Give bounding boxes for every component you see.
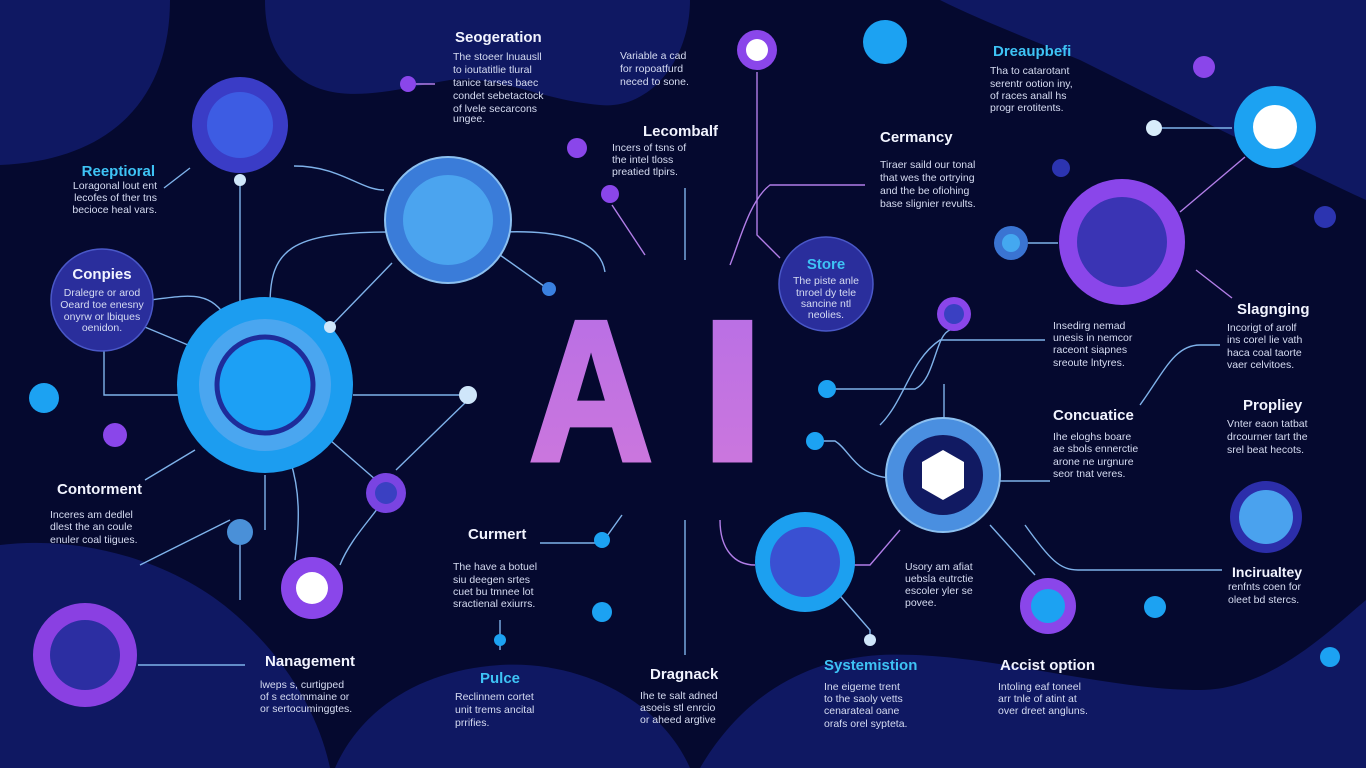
text: Seogeration: Seogeration [455, 29, 542, 46]
panel: Conpies: Conpies [72, 266, 132, 283]
node: top purple white [737, 30, 777, 70]
text: Insecing [1053, 320, 1133, 369]
text: Systemistion: orafs orel sypteta. [824, 718, 907, 730]
text: Pulce: Pulce [480, 670, 520, 687]
text: Seogeration: condet sebetactock [453, 90, 544, 102]
node: top-left blue [192, 77, 288, 173]
text: Slagnging: haca coal taorte [1227, 347, 1302, 359]
connectors [104, 72, 1245, 665]
text: Systemistion: Systemistion [824, 657, 917, 674]
text: Seogeration: ungee. [453, 113, 485, 125]
text: Propliey [1227, 397, 1308, 456]
text: Accist option [998, 657, 1095, 717]
text: Accist option: Intoling eaf toneel [998, 681, 1081, 693]
text: Contorment: dlest the an coule [50, 521, 132, 533]
text: Pulce: unit trems ancital [455, 704, 534, 716]
text: Seogeration: The stoeer lnuausll [453, 51, 542, 63]
text: Pulce: Reclinnem cortet [455, 691, 534, 703]
panel: Conpies [51, 249, 153, 351]
text: Contorment: Inceres am dedlel [50, 509, 133, 521]
text: Slagnging: ins corel lie vath [1227, 334, 1302, 346]
text: Reeptioral: Reeptioral [82, 163, 155, 180]
panel: Conpies: oenidon. [82, 322, 122, 334]
text: Curmert: sractienal exiurrs. [453, 598, 535, 610]
text: Curmert: siu deegen srtes [453, 574, 530, 586]
AI title: A [529, 280, 653, 503]
text: Incirualtey: Incirualtey [1232, 564, 1302, 580]
text: Curmert: Curmert [468, 526, 526, 543]
node: right dark blue [1230, 481, 1302, 553]
text: Variable: for ropoatfurd [620, 63, 683, 75]
text: Systemistion: to the saoly vetts [824, 693, 903, 705]
panel: Store: sancine ntl [801, 298, 851, 310]
AI title: I [700, 280, 765, 503]
text: Cermancy: Cermancy [880, 129, 953, 146]
text: Dreaupbefi: progr erotitents. [990, 102, 1064, 114]
node: bottom blue [755, 512, 855, 612]
text: Variable: Variable a cad [620, 50, 687, 62]
text: Usory: escoler yler se [905, 585, 973, 597]
text: Curmert: cuet bu tmnee lot [453, 586, 534, 598]
text: Curmert [453, 526, 537, 610]
text: Insecing: unesis in nemcor [1053, 332, 1133, 344]
text: Seogeration: of lvele secarcons [453, 103, 537, 115]
text: Propliey: srel beat hecots. [1227, 444, 1304, 456]
text: Reeptioral [72, 163, 157, 216]
text: Concuatice: seor tnat veres. [1053, 468, 1125, 480]
node: big purple right [1059, 179, 1185, 305]
text: Systemistion [824, 657, 917, 730]
text: Slagnging: vaer celvitoes. [1227, 359, 1294, 371]
text: Dreaupbefi: serentr ootion iny, [990, 78, 1073, 90]
text: Usory: uebsla eutrctie [905, 573, 973, 585]
text: Usory [905, 561, 973, 609]
text: Nanagement [260, 653, 355, 715]
text: Cermancy: Tiraer saild our tonal [880, 159, 975, 171]
text: Incirualtey: renfnts coen for [1228, 581, 1301, 593]
text: Incirualtey [1228, 564, 1302, 606]
panel: Store [779, 237, 873, 331]
text: Nanagement: lweps s, curtigped [260, 679, 344, 691]
text: Dreaupbefi: Tha to catarotant [990, 65, 1069, 77]
text: Accist option: over dreet angluns. [998, 705, 1088, 717]
node: hexagon hub [886, 418, 1000, 532]
node: top right white [1234, 86, 1316, 168]
text: Nanagement: Nanagement [265, 653, 355, 670]
text: Dreaupbefi: Dreaupbefi [993, 43, 1071, 60]
text: Dragnack: asoeis stl enrcio [640, 702, 715, 714]
panel: Store: neolies. [808, 309, 844, 321]
text: Pulce [455, 670, 534, 729]
text: Dreaupbefi: of races anall hs [990, 90, 1066, 102]
text: Concuatice: arone ne urgnure [1053, 456, 1134, 468]
text: Propliey: drcourner tart the [1227, 431, 1308, 443]
text: Reeptioral: Loragonal lout ent [73, 180, 157, 192]
text: Propliey: Vnter eaon tatbat [1227, 418, 1308, 430]
text: Usory: Usory am afiat [905, 561, 973, 573]
text: Insecing: raceont siapnes [1053, 344, 1127, 356]
text: Dragnack: Dragnack [650, 666, 719, 683]
text: Dreaupbefi [990, 43, 1073, 114]
text: Concuatice [1053, 407, 1138, 480]
text: Concuatice: Concuatice [1053, 407, 1134, 424]
text: Lecombalf: Lecombalf [643, 123, 719, 140]
text: Curmert: The have a botuel [453, 561, 537, 573]
text: Reeptioral: becioce heal vars. [72, 204, 157, 216]
text: Usory: povee. [905, 597, 937, 609]
text: Systemistion: cenarateal oane [824, 705, 899, 717]
text: Slagnging: Slagnging [1237, 301, 1310, 318]
text: Seogeration: tanice tarses baec [453, 77, 538, 89]
panel: Store: tnroel dy tele [796, 287, 856, 299]
text: Cermancy: base slignier revults. [880, 198, 976, 210]
text: Dragnack: Ihe te salt adned [640, 690, 718, 702]
text: Pulce: prrifies. [455, 717, 489, 729]
text: Cermancy: that wes the ortrying [880, 172, 975, 184]
node: upper middle blue [385, 157, 511, 283]
text: Variable [620, 50, 689, 88]
text: Slagnging: Incorigt of arolf [1227, 322, 1297, 334]
text: Propliey: Propliey [1243, 397, 1303, 414]
text: Lecombalf [612, 123, 719, 178]
text: Seogeration: to ioutatitlie tlural [453, 64, 532, 76]
node: bottom-left purple [33, 603, 137, 707]
text: Lecombalf: Incers of tsns of [612, 142, 686, 154]
text: Insecing: sreoute lntyres. [1053, 357, 1125, 369]
panel: Store: The piste anle [793, 275, 859, 287]
text: Seogeration [453, 29, 544, 125]
panel: Conpies: Dralegre or arod [64, 287, 140, 299]
text: Cermancy: and the be ofiohing [880, 185, 969, 197]
text: Contorment: Contorment [57, 481, 142, 498]
panel: Conpies: Oeard toe enesny [60, 299, 144, 311]
panel: Conpies: onyrw or lbiques [64, 311, 140, 323]
text: Concuatice: ae sbols ennerctie [1053, 443, 1138, 455]
text: Slagnging [1227, 301, 1310, 371]
text: Variable: neced to sone. [620, 76, 689, 88]
text: Accist option: Accist option [1000, 657, 1095, 674]
text: Incirualtey: oleet bd stercs. [1228, 594, 1299, 606]
text: Concuatice: Ihe eloghs boare [1053, 431, 1131, 443]
node: small blue right [994, 226, 1028, 260]
text: Nanagement: or sertocuminggtes. [260, 703, 352, 715]
text: Contorment [50, 481, 142, 546]
node: small purple center right [937, 297, 971, 331]
text: Reeptioral: lecofes of ther tns [74, 192, 157, 204]
text: Insecing: Insedirg nemad [1053, 320, 1126, 332]
text: Dragnack: or aheed argtive [640, 714, 716, 726]
text: Lecombalf: the intel tloss [612, 154, 673, 166]
node: small purple [366, 473, 406, 513]
text: Dragnack [640, 666, 719, 726]
node: purple white [281, 557, 343, 619]
text: Contorment: enuler coal tiigues. [50, 534, 138, 546]
panel: Store: Store [807, 256, 845, 273]
text: Nanagement: of s ectommaine or [260, 691, 350, 703]
text: Lecombalf: preatied tlpirs. [612, 166, 678, 178]
node: central left hub [177, 297, 353, 473]
AI title [529, 280, 765, 503]
text: Cermancy [880, 129, 976, 210]
text: Systemistion: Ine eigeme trent [824, 681, 900, 693]
node: purple cyan [1020, 578, 1076, 634]
text: Accist option: arr tnle of atint at [998, 693, 1077, 705]
